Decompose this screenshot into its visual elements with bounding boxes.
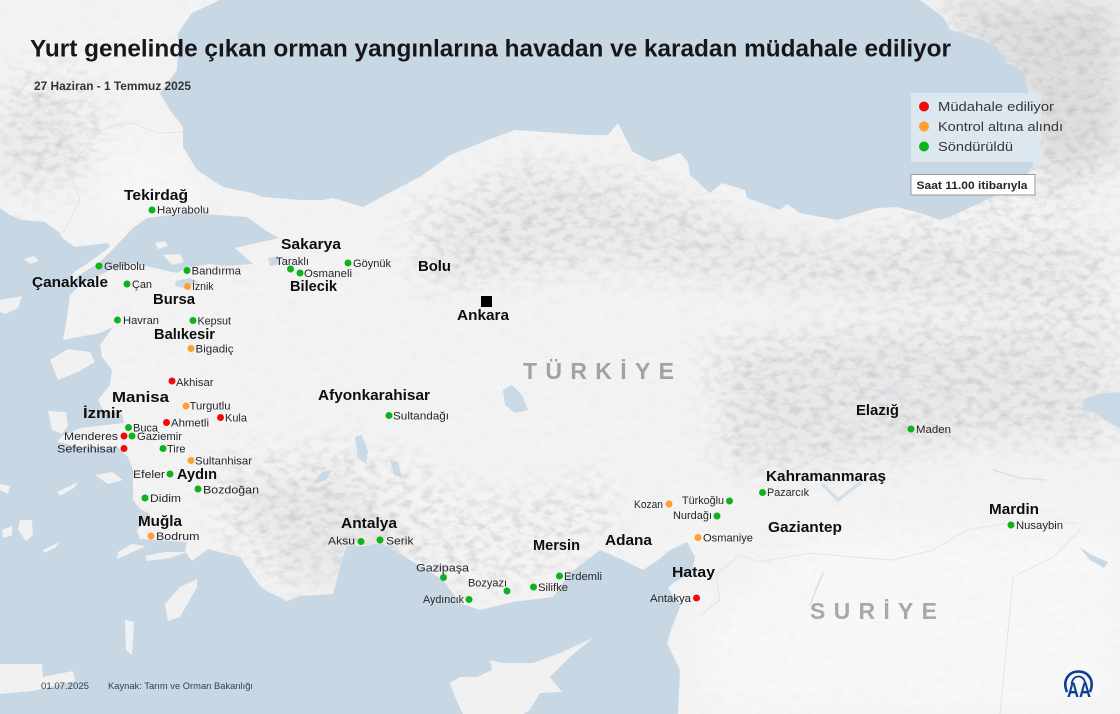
- fire markers with district names: Bozyazı: [468, 578, 507, 590]
- fire markers with district names: Aydıncık: [423, 594, 464, 606]
- time badge: [911, 174, 1035, 195]
- black sea: [160, 0, 1042, 220]
- province names: Muğla: [138, 514, 183, 530]
- fire markers with district names: Hayrabolu: [157, 204, 209, 216]
- marmara sea: [66, 213, 279, 295]
- legend: Kontrol altına alındı: [938, 119, 1063, 134]
- fire markers with district names: Taraklı: [276, 256, 309, 268]
- fire markers with district names: Göynük: [353, 258, 391, 270]
- fire markers with district names: Antakya: [650, 593, 692, 605]
- fire markers with district names: Didim: [150, 493, 181, 505]
- fire markers with district names: Seferihisar: [57, 444, 117, 456]
- fire markers with district names: Ahmetli: [171, 418, 209, 430]
- fire markers with district names: Aksu: [328, 536, 355, 548]
- fire markers with district names: İznik: [192, 280, 214, 293]
- fire markers with district names: Nurdağı: [673, 510, 712, 522]
- reservoirs: [810, 377, 1045, 605]
- rhodes: [165, 579, 197, 621]
- fire markers with district names: Akhisar: [176, 377, 214, 389]
- province names: Çanakkale: [32, 275, 108, 291]
- province names: Mardin: [989, 502, 1039, 518]
- fire markers with district names: Bozdoğan: [203, 484, 259, 496]
- legend: [911, 93, 1063, 162]
- province names: Afyonkarahisar: [318, 388, 430, 404]
- province names: Mersin: [533, 538, 580, 554]
- legend: Söndürüldü: [938, 139, 1013, 154]
- province names: İzmir: [83, 405, 122, 422]
- aegean islands: [0, 241, 187, 655]
- fire markers with district names: Menderes: [64, 431, 119, 443]
- source note: Kaynak: Tarım ve Orman Bakanlığı: [108, 681, 253, 692]
- fire markers with district names: Silifke: [538, 582, 568, 594]
- legend: Müdahale ediliyor: [938, 99, 1055, 114]
- time badge: Saat 11.00 itibarıyla: [916, 180, 1028, 192]
- icon: Anadolu Agency logo: [1065, 672, 1092, 702]
- crete: [0, 664, 75, 694]
- cyprus: [450, 638, 593, 714]
- province names: Adana: [605, 533, 653, 549]
- islands and lakes: [0, 241, 1120, 714]
- fire markers with district names: Osmaneli: [304, 268, 352, 280]
- province names: Balıkesir: [154, 327, 215, 343]
- province names: Manisa: [112, 390, 170, 406]
- fire markers with district names: Tire: [167, 444, 186, 456]
- fire markers with district names: Havran: [123, 315, 159, 327]
- fire markers with district names: Gelibolu: [104, 261, 145, 273]
- province names: Hatay: [672, 565, 715, 581]
- fire markers with district names: Nusaybin: [1016, 520, 1063, 532]
- country labels: [523, 358, 937, 624]
- fire markers with district names: Kepsut: [198, 316, 231, 328]
- country labels: TÜRKİYE: [523, 358, 674, 384]
- province names: Tekirdağ: [124, 188, 188, 204]
- province names: Bolu: [418, 259, 451, 275]
- fire markers with district names: Pazarcık: [767, 487, 809, 499]
- fire markers with district names: Bigadiç: [196, 344, 234, 356]
- footer date: 01.07.2025: [41, 681, 89, 692]
- fire markers with district names: Gazipaşa: [416, 562, 470, 574]
- fire markers with district names: Erdemli: [564, 571, 602, 583]
- Ankara capital marker: Ankara: [457, 308, 510, 324]
- icon: Anadolu Agency logo: AA: [1067, 679, 1091, 702]
- fire markers with district names: Kula: [225, 412, 248, 424]
- province names: Bilecik: [290, 279, 338, 295]
- fire markers with district names: Çan: [132, 279, 152, 291]
- country labels: SURİYE: [810, 598, 937, 624]
- fire markers with district names: Turgutlu: [190, 400, 230, 412]
- date range subtitle: 27 Haziran - 1 Temmuz 2025: [34, 79, 191, 93]
- fire markers with district names: Sultanhisar: [195, 456, 252, 468]
- fire markers with district names: Bodrum: [156, 531, 200, 543]
- province names: Kahramanmaraş: [766, 469, 886, 485]
- province names: Bursa: [153, 292, 196, 308]
- province names: Aydın: [177, 467, 217, 483]
- province names: Antalya: [341, 516, 398, 532]
- aegean and mediterranean: [0, 208, 695, 714]
- lakes: [175, 256, 1120, 568]
- fire markers with district names: Maden: [916, 424, 951, 436]
- title: Yurt genelinde çıkan orman yangınlarına havadan ve karadan müdahale ediliyor: [30, 36, 951, 62]
- fire markers with district names: Bandırma: [192, 266, 242, 278]
- province names: Elazığ: [856, 403, 899, 419]
- province names: Gaziantep: [768, 520, 842, 536]
- Ankara capital marker: [457, 296, 510, 324]
- fire markers with district names: Serik: [386, 536, 414, 548]
- fire markers with district names: [57, 204, 1063, 606]
- fire markers with district names: Osmaniye: [703, 532, 753, 544]
- fire markers with district names: Türkoğlu: [682, 495, 724, 507]
- province names: Sakarya: [281, 237, 342, 253]
- province names: [32, 188, 1039, 581]
- fire markers with district names: Sultandağı: [393, 410, 449, 422]
- fire markers with district names: Kozan: [634, 499, 663, 511]
- fire markers with district names: Buca: [133, 422, 159, 434]
- fire markers with district names: Efeler: [133, 469, 165, 481]
- fire markers with district names: Gaziemir: [137, 431, 182, 443]
